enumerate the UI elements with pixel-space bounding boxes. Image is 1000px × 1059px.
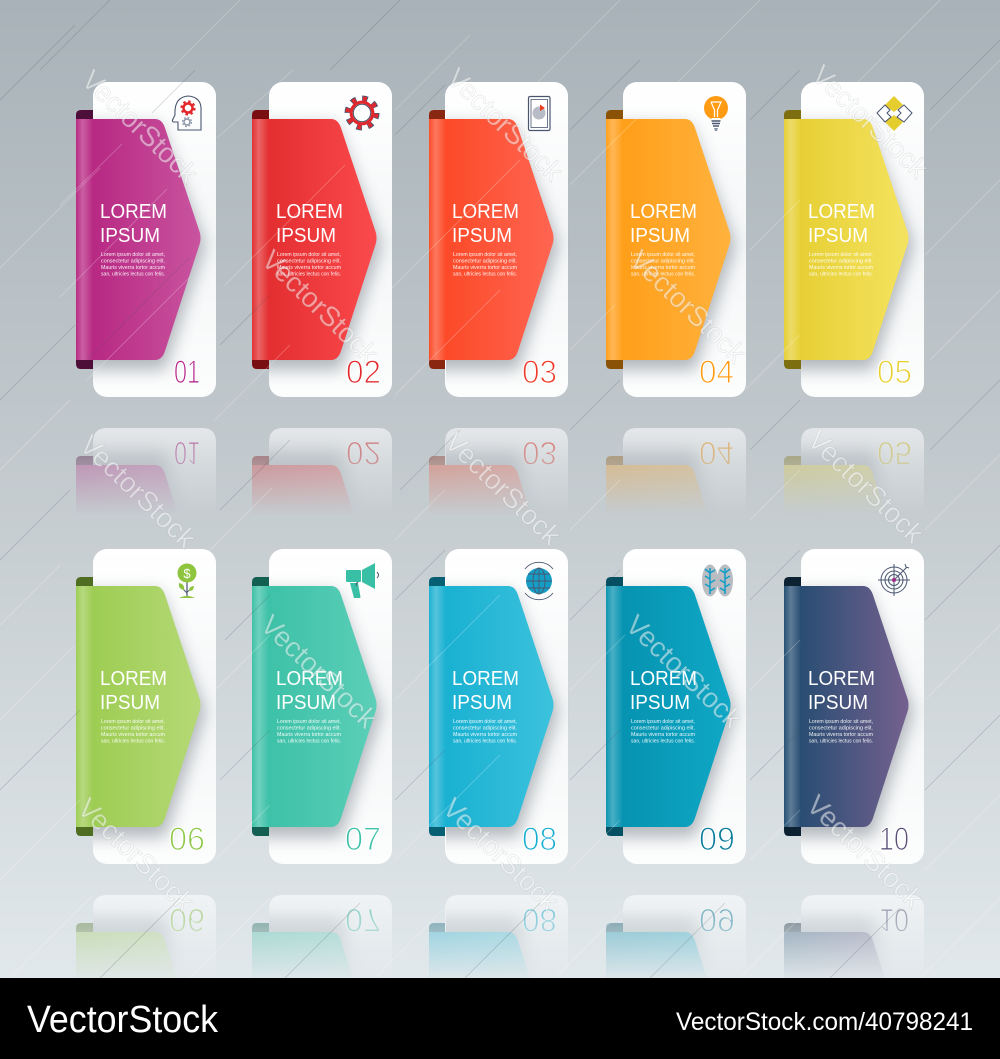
text block 06: Mauris viverra tortor accum	[101, 732, 165, 738]
heading 04: LOREM	[630, 201, 697, 223]
reflection: card 03: 03	[522, 435, 557, 471]
text block 06: Lorem ipsum dolor sit amet,	[101, 719, 165, 725]
text block 10: consectetur adipiscing elit.	[809, 726, 873, 732]
ribbon 08	[429, 586, 554, 827]
heading 02: LOREM	[276, 201, 343, 223]
panel: card 08	[429, 549, 568, 864]
number 02: 02	[346, 354, 381, 390]
heading 10: IPSUM	[808, 692, 868, 714]
number 07: 07	[345, 821, 381, 857]
icon: tablet with pie chart	[528, 96, 550, 130]
icon: puzzle	[877, 96, 912, 131]
watermarks: VectorStock	[72, 792, 201, 918]
reflection: card 04: 04	[699, 435, 734, 471]
heading 09: IPSUM	[630, 692, 690, 714]
reflection: card 01: 01	[174, 435, 200, 471]
watermarks: VectorStock	[255, 609, 384, 735]
text block 07	[277, 719, 341, 744]
icon: head with gears	[172, 96, 201, 130]
watermarks: VectorStock	[76, 64, 205, 190]
watermarks: VectorStock	[256, 244, 385, 370]
reflection: card 06: 06	[169, 902, 205, 938]
heading 06: IPSUM	[100, 692, 160, 714]
heading 07: LOREM	[276, 668, 343, 690]
text block 10: Mauris viverra tortor accum	[809, 732, 873, 738]
text block 04: Lorem ipsum dolor sit amet,	[631, 252, 695, 258]
heading 10: LOREM	[808, 668, 875, 690]
text block 10: san, ultricies lectus con felis.	[809, 738, 873, 744]
reflections: row one	[76, 428, 924, 508]
reflection: card 02	[252, 428, 392, 507]
text block 04	[631, 252, 695, 278]
text block 03: consectetur adipiscing elit.	[453, 258, 517, 264]
text block 08: Lorem ipsum dolor sit amet,	[453, 719, 517, 725]
reflection: card 09	[606, 895, 746, 978]
text block 07: Lorem ipsum dolor sit amet,	[277, 719, 341, 725]
text block 05: Lorem ipsum dolor sit amet,	[809, 252, 873, 258]
text block 01: consectetur adipiscing elit.	[101, 258, 165, 264]
panel: card 03	[429, 82, 568, 397]
reflection: card 07	[252, 895, 392, 978]
ribbon 05	[784, 119, 908, 360]
text block 09: consectetur adipiscing elit.	[631, 726, 695, 732]
text block 06: consectetur adipiscing elit.	[101, 726, 165, 732]
reflection: card 09: 09	[699, 902, 735, 938]
heading 05: IPSUM	[808, 225, 868, 247]
icon: money plant: $	[183, 566, 191, 581]
text block 04: san, ultricies lectus con felis.	[631, 272, 695, 278]
icon: megaphone	[346, 563, 378, 598]
heading 06: LOREM	[100, 668, 167, 690]
reflections: row two	[76, 895, 924, 978]
text block 08: Mauris viverra tortor accum	[453, 732, 517, 738]
heading 03	[452, 201, 519, 247]
heading 09: LOREM	[630, 668, 697, 690]
reflection: card 10: 10	[879, 902, 909, 938]
footer url: VectorStock.com/40798241	[676, 1008, 973, 1036]
text block 05: consectetur adipiscing elit.	[809, 258, 873, 264]
watermarks: VectorStock	[801, 789, 930, 915]
panel: card 07	[252, 549, 392, 864]
heading 09	[630, 668, 697, 714]
text block 07: Mauris viverra tortor accum	[277, 732, 341, 738]
text block 03	[453, 252, 517, 278]
number 08: 08	[522, 821, 557, 857]
text block 04: Mauris viverra tortor accum	[631, 265, 695, 271]
ribbon 04	[606, 119, 730, 360]
heading 01: IPSUM	[100, 225, 160, 247]
number 05: 05	[877, 354, 912, 390]
watermarks: VectorStock	[624, 244, 753, 370]
text block 02: san, ultricies lectus con felis.	[277, 272, 341, 278]
heading 08: IPSUM	[452, 692, 512, 714]
ribbon 07	[252, 586, 376, 827]
text block 03: Lorem ipsum dolor sit amet,	[453, 252, 517, 258]
watermarks: VectorStock	[620, 609, 749, 735]
panel: card 01	[76, 82, 216, 397]
heading 03: LOREM	[452, 201, 519, 223]
text block 02: consectetur adipiscing elit.	[277, 258, 341, 264]
heading 02: IPSUM	[276, 225, 336, 247]
heading 04: IPSUM	[630, 225, 690, 247]
panel: card 06	[76, 549, 216, 864]
text block 08: san, ultricies lectus con felis.	[453, 738, 517, 744]
icon: gear	[348, 98, 376, 128]
text block 05: san, ultricies lectus con felis.	[809, 272, 873, 278]
ribbon 09	[606, 586, 730, 827]
reflection: card 02: 02	[346, 435, 381, 471]
reflection: card 05: 05	[877, 435, 912, 471]
reflection: card 07: 07	[345, 902, 381, 938]
heading 01: LOREM	[100, 201, 167, 223]
heading 04	[630, 201, 697, 247]
reflection: card 05	[784, 428, 924, 507]
number 01: 01	[174, 354, 200, 390]
heading 07: IPSUM	[276, 692, 336, 714]
text block 09: Mauris viverra tortor accum	[631, 732, 695, 738]
text block 01: Mauris viverra tortor accum	[101, 265, 165, 271]
text block 07: consectetur adipiscing elit.	[277, 726, 341, 732]
text block 01: Lorem ipsum dolor sit amet,	[101, 252, 165, 258]
text block 05	[809, 252, 873, 278]
watermarks	[72, 59, 935, 918]
ribbon 06	[76, 586, 200, 827]
watermarks: VectorStock	[437, 792, 566, 918]
icon: brain	[702, 564, 733, 596]
number 09: 09	[699, 821, 735, 857]
text block 06: san, ultricies lectus con felis.	[101, 738, 165, 744]
text block 02	[277, 252, 341, 278]
text block 05: Mauris viverra tortor accum	[809, 265, 873, 271]
heading 10	[808, 668, 875, 714]
watermarks: VectorStock	[74, 429, 203, 555]
icon: target	[878, 564, 910, 596]
reflection: card 10	[784, 895, 924, 978]
text block 09: Lorem ipsum dolor sit amet,	[631, 719, 695, 725]
heading 03: IPSUM	[452, 225, 512, 247]
heading 06	[100, 668, 167, 714]
number 03: 03	[522, 354, 557, 390]
text block 08: consectetur adipiscing elit.	[453, 726, 517, 732]
text block 09	[631, 719, 695, 744]
ribbon 02	[252, 119, 376, 360]
text block 03: Mauris viverra tortor accum	[453, 265, 517, 271]
text block 08	[453, 719, 517, 744]
heading 08: LOREM	[452, 668, 519, 690]
panel: card 04	[606, 82, 746, 397]
icon: money plant	[178, 564, 196, 598]
text block 10: Lorem ipsum dolor sit amet,	[809, 719, 873, 725]
text block 01	[101, 252, 165, 278]
text block 02: Mauris viverra tortor accum	[277, 265, 341, 271]
panel: card 05	[784, 82, 924, 397]
text block 07: san, ultricies lectus con felis.	[277, 738, 341, 744]
watermarks: VectorStock	[802, 424, 931, 550]
reflection: card 03	[429, 428, 568, 507]
footer bar	[0, 978, 1000, 1059]
text block 04: consectetur adipiscing elit.	[631, 258, 695, 264]
icon: globe	[525, 562, 553, 600]
heading 05: LOREM	[808, 201, 875, 223]
footer logo: VectorStock	[27, 999, 219, 1041]
panel: card 10	[784, 549, 924, 864]
watermarks: VectorStock	[441, 62, 570, 188]
watermarks: VectorStock	[439, 426, 568, 552]
panel: card 02	[252, 82, 392, 397]
ribbon 03	[429, 119, 554, 360]
reflection: card 08: 08	[522, 902, 557, 938]
reflection: card 01	[76, 428, 216, 507]
watermarks: VectorStock	[806, 59, 935, 185]
icon: light bulb	[704, 96, 728, 131]
number 06: 06	[169, 821, 205, 857]
heading 08	[452, 668, 519, 714]
reflection: card 04	[606, 428, 746, 508]
number 10: 10	[879, 821, 909, 857]
reflection: card 08	[429, 895, 568, 978]
ribbon 01	[76, 119, 200, 360]
text block 06	[101, 719, 165, 744]
text block 02: Lorem ipsum dolor sit amet,	[277, 252, 341, 258]
heading 02	[276, 201, 343, 247]
text block 10	[809, 719, 873, 744]
reflection: card 06	[76, 895, 216, 978]
panel: card 09	[606, 549, 746, 864]
text block 09: san, ultricies lectus con felis.	[631, 738, 695, 744]
heading 01	[100, 201, 167, 247]
heading 05	[808, 201, 875, 247]
ribbon 10	[784, 586, 908, 827]
heading 07	[276, 668, 343, 714]
text block 03: san, ultricies lectus con felis.	[453, 272, 517, 278]
text block 01: san, ultricies lectus con felis.	[101, 272, 165, 278]
number 04: 04	[699, 354, 734, 390]
